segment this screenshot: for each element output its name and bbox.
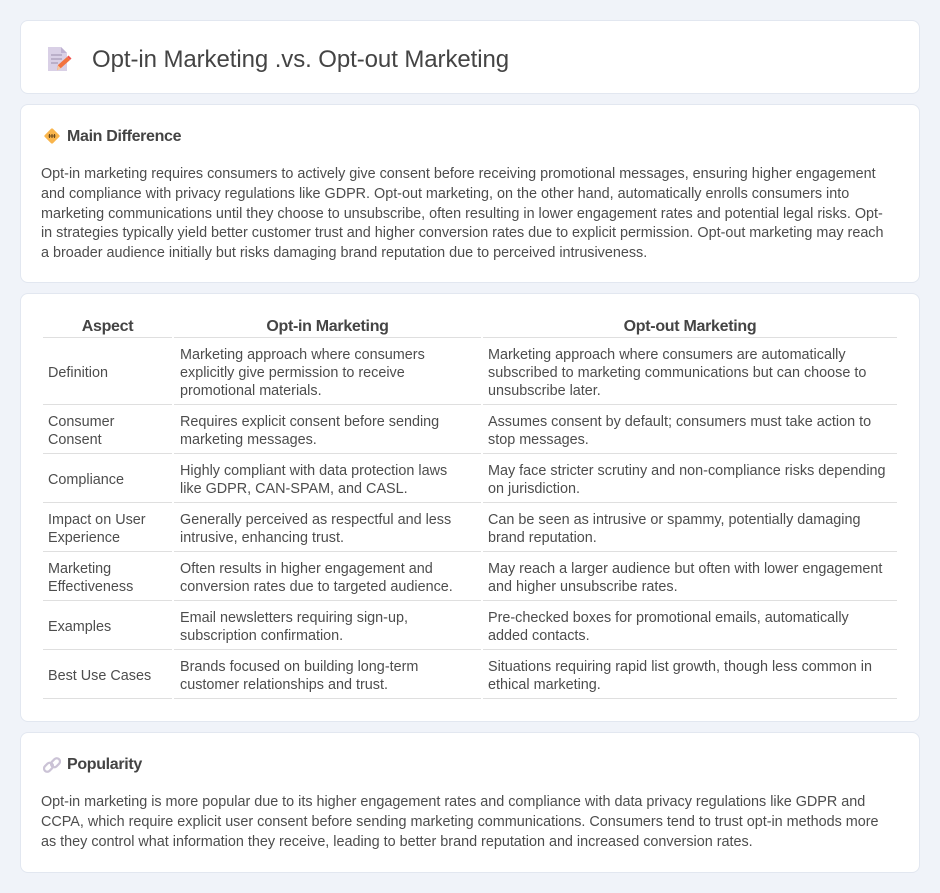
text: main difference paragraph: Opt-in marketing requires consumers to actively give consent before receiving promotional messages, ensuring higher engagement and compliance with privacy regulations like GDPR. Opt-out marketing, on the other hand, automatically enrolls consumers into marketing communications until they choose to unsubscribe, often resulting in lower engagement rates and potential legal risks. Opt- in strategies typically yield better customer trust and higher conversion rates due to explicit permission. Opt-out marketing may reach a broader audience initially but risks damaging brand reputation due to perceived intrusiveness. [41,166,884,261]
cell: impact opt-out: Can be seen as intrusive or spammy, potentially damaging brand reputation. [488,512,860,546]
row: compliance: Compliance [48,472,124,488]
row: examples: Examples [48,619,111,635]
row: marketing effectiveness: Marketing Effectiveness [48,561,133,595]
header: opt-out marketing: Opt-out Marketing [624,318,756,335]
cell: definition opt-in: Marketing approach where consumers explicitly give permission to receive promotional materials. [180,347,425,399]
cell: examples opt-in: Email newsletters requiring sign-up, subscription confirmation. [180,610,408,644]
header: opt-in marketing: Opt-in Marketing [266,318,389,335]
heading: popularity: Popularity [67,756,142,773]
title: Opt-in Marketing .vs. Opt-out Marketing [92,46,509,73]
cell: effectiveness opt-in: Often results in higher engagement and conversion rates due to targeted audience. [180,561,453,595]
header: aspect: Aspect [82,318,133,335]
cell: compliance opt-in: Highly compliant with data protection laws like GDPR, CAN-SPAM, and CASL. [180,463,447,497]
row: consumer consent: Consumer Consent [48,414,114,448]
text: popularity paragraph: Opt-in marketing is more popular due to its higher engagement rates and compliance with data privacy regulations like GDPR and CCPA, which require explicit user consent before sending marketing communications. Consumers tend to trust opt-in methods more as they control what information they receive, leading to better brand reputation and increased conversion rates. [41,794,879,850]
cell: impact opt-in: Generally perceived as respectful and less intrusive, enhancing trust. [180,512,451,546]
icon: link [43,757,61,773]
cell: definition opt-out: Marketing approach where consumers are automatically subscribed to marketing communications but can choose to unsubscribe later. [488,347,866,399]
cell: compliance opt-out: May face stricter scrutiny and non-compliance risks depending on jurisdiction. [488,463,886,497]
cell: best use cases opt-out: Situations requiring rapid list growth, though less common in ethical marketing. [488,659,872,693]
heading: main difference: Main Difference [67,128,181,145]
row: best use cases: Best Use Cases [48,668,151,684]
cell: best use cases opt-in: Brands focused on building long-term customer relationships and trust. [180,659,418,693]
row: definition: Definition [48,365,108,381]
row: impact on user experience: Impact on User Experience [48,512,146,546]
panel: popularity [20,732,920,873]
icon: warning diamond [44,128,60,144]
panel: comparison table [20,293,920,722]
cell: consumer consent opt-out: Assumes consent by default; consumers must take action to stop messages. [488,414,871,448]
panel: title card [20,20,920,94]
icon: memo with pencil [48,47,72,71]
cell: consumer consent opt-in: Requires explicit consent before sending marketing messages. [180,414,439,448]
cell: examples opt-out: Pre-checked boxes for promotional emails, automatically added contacts. [488,610,849,644]
cell: effectiveness opt-out: May reach a larger audience but often with lower engagement and higher unsubscribe rates. [488,561,882,595]
panel: main difference [20,104,920,283]
